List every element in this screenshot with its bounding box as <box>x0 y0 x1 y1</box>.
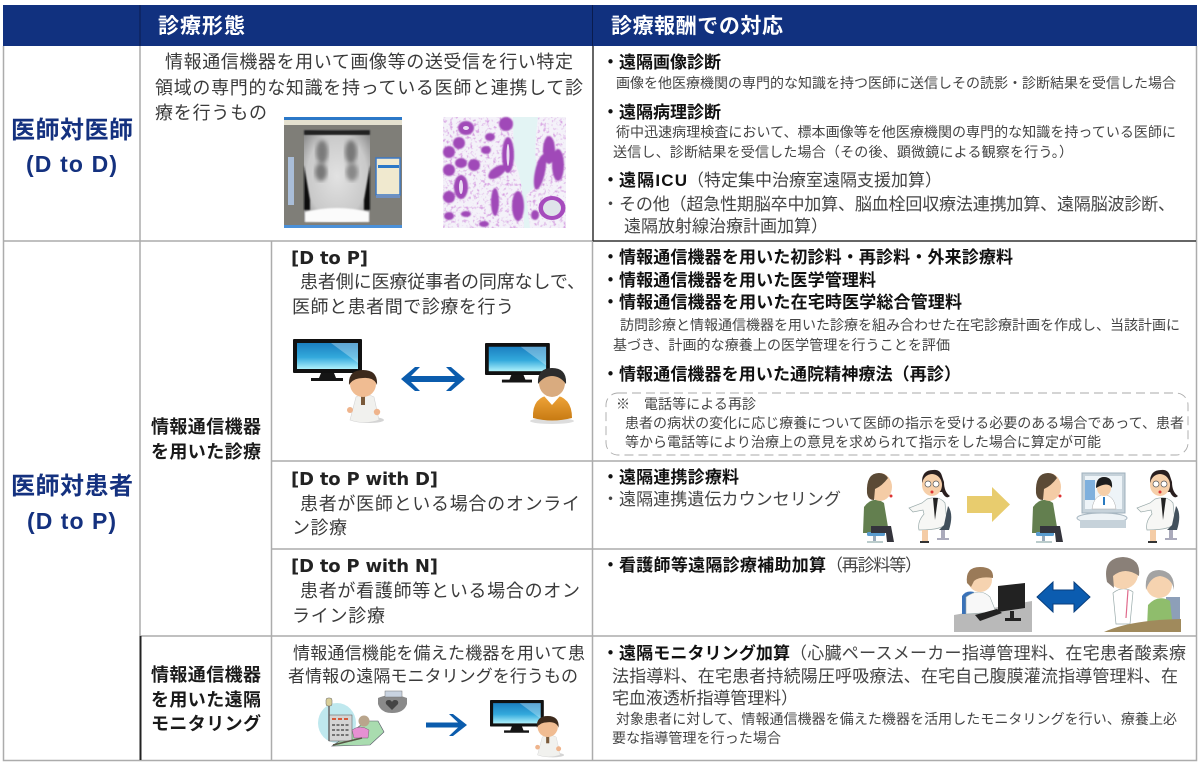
list: D to D reimbursement: 術中迅速病理検査において、標本画像等を他医療機関の専門的な知識を持っている医師に <box>616 124 1176 140</box>
text: D to D description: 情報通信機器を用いて画像等の送受信を行い特定 <box>165 52 573 72</box>
image: pathology slide <box>443 117 566 228</box>
list: remote monitoring reimbursement: 遠隔モニタリング加算 <box>619 643 790 663</box>
list: D to P with N reimbursement: ・ <box>602 556 619 575</box>
arrow: two way <box>401 367 465 391</box>
row label: doctor to doctor <box>11 117 133 177</box>
arrow: monitoring data flow <box>426 714 467 736</box>
text: D to P with D <box>291 469 580 538</box>
sub label: telemedicine: を用いた診療 <box>151 442 261 462</box>
text: D to P: [D to P] <box>291 248 368 269</box>
list: D to D reimbursement: ・ <box>602 103 619 122</box>
row label: doctor to doctor: 医師対医師 <box>11 117 133 144</box>
list: D to D reimbursement: ・ <box>602 195 619 214</box>
sub label: remote monitoring: を用いた遠隔 <box>151 690 261 710</box>
row label: doctor to doctor: (D to D) <box>26 151 117 177</box>
callout: telephone re-consultation: 電話等による再診 <box>644 396 756 412</box>
list: D to P with N reimbursement: 看護師等遠隔診療補助加算 <box>619 555 826 575</box>
sub label: remote monitoring: モニタリング <box>151 713 261 734</box>
sub label: remote monitoring: 情報通信機器 <box>151 665 261 685</box>
icon: monitor with doctor (monitoring) <box>490 700 564 757</box>
text: D to D description <box>155 52 583 123</box>
illustration: consultation with remote doctor <box>1032 470 1179 543</box>
icon: monitor with patient <box>485 343 574 424</box>
sub label: telemedicine: 情報通信機器 <box>151 417 261 437</box>
list: D to P reimbursement: 情報通信機器を用いた在宅時医学総合管理料 <box>619 292 962 312</box>
list: D to D reimbursement: （特定集中治療室遠隔支援加算） <box>687 171 942 190</box>
list: remote monitoring reimbursement: （心臓ペースメーカー指導管理料、在宅患者酸素療 <box>790 644 1186 663</box>
list: D to D reimbursement: 遠隔病理診断 <box>619 103 721 122</box>
icon: pacemaker <box>378 691 407 713</box>
text: D to D description: 領域の専門的な知識を持っている医師と連携して診 <box>155 78 583 98</box>
list: D to P with N reimbursement: （再診料等） <box>826 556 922 575</box>
list: D to P reimbursement: 情報通信機器を用いた通院精神療法（再診） <box>619 365 961 384</box>
list: D to P with D reimbursement: 遠隔連携遺伝カウンセリング <box>619 490 841 509</box>
list: D to D reimbursement: その他（超急性期脳卒中加算、脳血栓回収療法連携加算、遠隔脳波診断、 <box>619 195 1175 214</box>
text: D to D description: 療を行うもの <box>155 103 267 123</box>
callout: telephone re-consultation: ※ <box>616 396 630 412</box>
list: D to P reimbursement: 訪問診療と情報通信機器を用いた診療を組み合わせた在宅診療計画を作成し、当該計画に <box>620 317 1180 333</box>
icon: monitor with doctor <box>293 339 384 423</box>
list: remote monitoring reimbursement: 要な指導管理を行った場合 <box>612 730 781 746</box>
list: remote monitoring reimbursement: 宅血液透析指導管理料） <box>612 689 798 708</box>
list: remote monitoring reimbursement: 対象患者に対して、情報通信機器を備えた機器を活用したモニタリングを行い、療養上必 <box>616 711 1177 727</box>
list: D to P with D reimbursement <box>602 468 841 509</box>
list: D to P reimbursement: ・ <box>602 293 619 312</box>
text: remote monitoring description: 情報通信機能を備えた機器を用いて患 <box>293 644 585 663</box>
heading: consultation type: 診療形態 <box>158 15 245 38</box>
header band <box>3 5 1197 46</box>
text: D to P: 患者側に医療従事者の同席なしで、 <box>300 272 585 292</box>
callout: telephone re-consultation <box>606 393 1188 455</box>
list: D to P reimbursement: 情報通信機器を用いた医学管理料 <box>619 270 876 290</box>
list: D to P with D reimbursement: ・ <box>602 468 619 487</box>
list: D to D reimbursement: 遠隔放射線治療計画加算） <box>624 217 828 236</box>
list: D to P reimbursement: 情報通信機器を用いた初診料・再診料・外来診療料 <box>619 248 1013 267</box>
icon: dialysis patient <box>318 698 384 746</box>
list: D to P reimbursement <box>602 248 1180 384</box>
list: D to D reimbursement: 遠隔画像診断 <box>619 53 721 72</box>
heading: reimbursement: 診療報酬での対応 <box>611 15 783 38</box>
list: D to D reimbursement <box>602 53 1176 236</box>
text: D to P: 医師と患者間で診療を行う <box>292 297 514 317</box>
illustration: nurse with patient <box>1104 557 1181 632</box>
list: D to P reimbursement: ・ <box>602 248 619 267</box>
list: D to D reimbursement: 遠隔ICU <box>619 171 687 190</box>
list: remote monitoring reimbursement: 法指導料、在宅患者持続陽圧呼吸療法、在宅自己腹膜灌流指導管理料、在 <box>612 667 1178 686</box>
row label: doctor to patient <box>11 473 133 534</box>
list: D to D reimbursement: ・ <box>602 53 619 72</box>
list: D to D reimbursement: ・ <box>602 171 619 190</box>
text: D to P <box>291 248 585 317</box>
list: D to P reimbursement: ・ <box>602 365 619 384</box>
arrow: transition <box>967 487 1010 522</box>
text: remote monitoring description <box>288 644 585 686</box>
list: remote monitoring reimbursement: ・ <box>602 644 619 663</box>
text: remote monitoring description: 者情報の遠隔モニタリングを行うもの <box>288 667 578 686</box>
text: D to P with D: 患者が医師といる場合のオンライ <box>300 494 580 514</box>
text: D to P with N: 患者が看護師等といる場合のオン <box>300 581 580 601</box>
list: D to P reimbursement: ・ <box>602 271 619 290</box>
arrow: two way wide <box>1037 582 1090 612</box>
text: D to P with N: [D to P with N] <box>291 556 438 577</box>
text: D to P with D: ン診療 <box>292 518 347 538</box>
list: D to P with N reimbursement <box>602 555 922 575</box>
sub label: remote monitoring <box>151 665 261 734</box>
list: D to P reimbursement: 基づき、計画的な療養上の医学管理を行うことを評価 <box>613 337 950 353</box>
list: D to P with D reimbursement: 遠隔連携診療料 <box>619 468 739 487</box>
callout: telephone re-consultation: 等から電話等により治療上の意見を求められて指示をした場合に算定が可能 <box>625 434 1101 450</box>
sub label: telemedicine <box>151 417 261 462</box>
row label: doctor to patient: 医師対患者 <box>11 473 133 500</box>
row label: doctor to patient: (D to P) <box>27 508 116 534</box>
text: D to P with D: [D to P with D] <box>291 469 438 490</box>
illustration: in-person consultation <box>863 470 951 543</box>
callout: telephone re-consultation: 患者の病状の変化に応じ療養について医師の指示を受ける必要のある場合であって、患者 <box>625 415 1184 431</box>
text: D to P with N <box>291 556 580 626</box>
image: chest x-ray viewer <box>284 117 402 228</box>
illustration: doctor at desk <box>954 567 1032 632</box>
list: remote monitoring reimbursement <box>602 643 1186 746</box>
list: D to D reimbursement: 送信し、診断結果を受信した場合（その後、顕微鏡による観察を行う。） <box>613 144 1073 160</box>
text: D to P with N: ライン診療 <box>292 606 385 626</box>
list: D to D reimbursement: 画像を他医療機関の専門的な知識を持つ医師に送信しその読影・診断結果を受信した場合 <box>616 75 1176 91</box>
list: D to P with D reimbursement: ・ <box>602 490 619 509</box>
